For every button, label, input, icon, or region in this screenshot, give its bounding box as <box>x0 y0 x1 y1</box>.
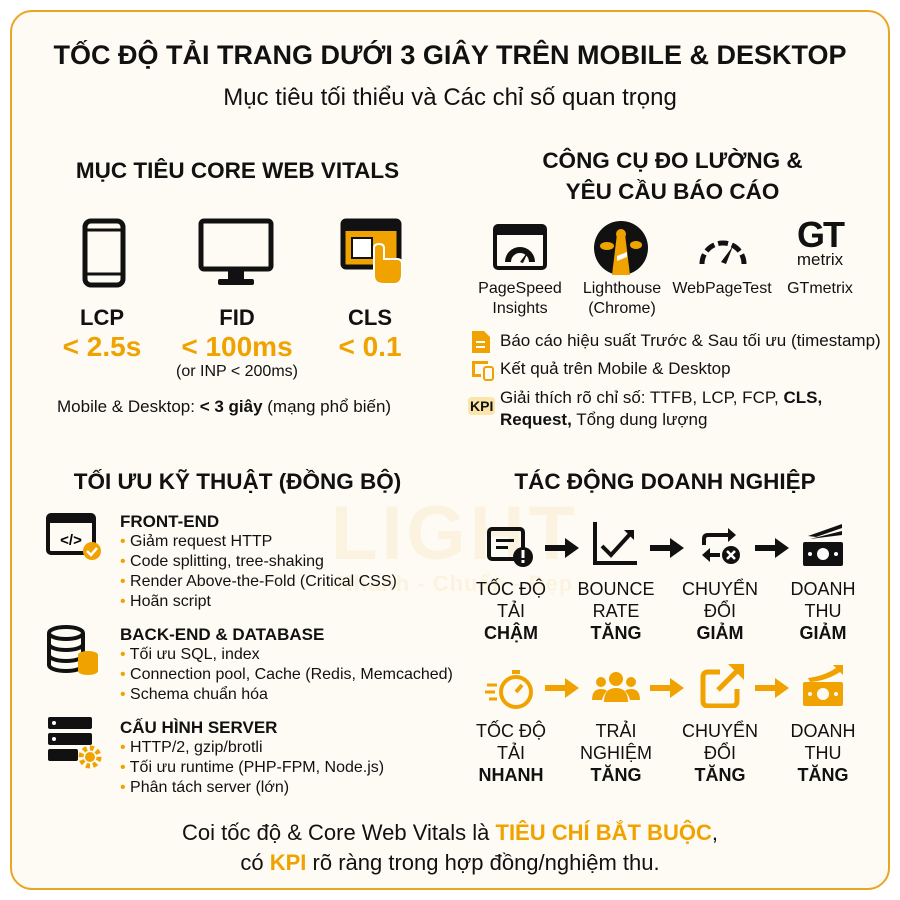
text: front-end: FRONT-END <box>120 512 219 531</box>
icon: conversion up <box>700 662 746 708</box>
row: fast chain: TĂNG <box>798 765 848 785</box>
icon: monitor <box>198 218 274 285</box>
icon: stopwatch <box>485 670 533 709</box>
labels: TẢI <box>497 601 525 621</box>
row: slow chain: CHUYỂN <box>682 579 758 599</box>
metric: CLS <box>338 305 402 362</box>
arrow <box>650 538 684 558</box>
row: fast chain: TRẢI <box>595 721 636 741</box>
tool labels: (Chrome) <box>588 300 656 317</box>
arrow <box>755 538 789 558</box>
text: back-end: Tối ưu SQL, index <box>130 646 260 663</box>
text: server <box>120 718 384 796</box>
text: back-end <box>120 625 453 703</box>
tool labels: Insights <box>492 300 548 317</box>
text: front-end: Giảm request HTTP <box>130 533 272 550</box>
arrow <box>545 678 579 698</box>
report requirements list: Giải thích rõ chỉ số: TTFB, LCP, FCP, CLS, <box>500 388 822 407</box>
row: fast chain <box>476 664 856 785</box>
heading: tools: CÔNG CỤ ĐO LƯỜNG & <box>542 148 803 173</box>
footer callout: có KPI rõ ràng trong hợp đồng/nghiệm thu. <box>240 850 660 875</box>
icon: document <box>472 331 490 353</box>
text: back-end: BACK-END & DATABASE <box>120 625 324 644</box>
icon: front-end code <box>46 513 101 560</box>
icon: cls <box>340 218 403 285</box>
row: slow chain: BOUNCE <box>577 579 654 599</box>
labels <box>476 578 546 643</box>
text: back-end: Connection pool, Cache (Redis, Memcached) <box>130 666 453 683</box>
icon: front-end code: </> <box>60 532 82 549</box>
panel: business impact <box>476 468 856 785</box>
heading: core web vitals: MỤC TIÊU CORE WEB VITALS <box>76 158 399 183</box>
metric: FID: (or INP < 200ms) <box>176 363 298 380</box>
icon: devices <box>472 361 494 381</box>
tool labels: WebPageTest <box>672 280 772 297</box>
text: front-end: Hoãn script <box>130 593 211 610</box>
icon: conversion fail <box>702 528 740 564</box>
metric: FID: < 100ms <box>181 331 293 362</box>
text: server: CẤU HÌNH SERVER <box>120 718 277 737</box>
tool labels: Lighthouse <box>583 280 661 297</box>
heading: technical: TỐI ƯU KỸ THUẬT (ĐỒNG BỘ) <box>74 469 401 494</box>
report requirements list: Báo cáo hiệu suất Trước & Sau tối ưu (timestamp) <box>500 331 881 350</box>
text: server: Phân tách server (lớn) <box>130 779 289 796</box>
labels: CHẬM <box>484 623 538 643</box>
icon: kpi: KPI <box>470 398 493 414</box>
panel: tools <box>468 148 881 429</box>
row: slow chain: TĂNG <box>590 623 642 643</box>
labels: TỐC ĐỘ <box>476 721 546 741</box>
row: fast chain: NGHIỆM <box>580 743 652 763</box>
footer callout: Coi tốc độ & Core Web Vitals là TIÊU CHÍ BẮT BUỘC, <box>182 820 718 845</box>
metric: LCP: < 2.5s <box>63 331 141 362</box>
text: server: HTTP/2, gzip/brotli <box>130 739 263 756</box>
row: slow chain: GIẢM <box>696 623 744 643</box>
row: slow chain <box>476 522 856 643</box>
icon: pagespeed <box>493 224 547 270</box>
watermark: LIGHT <box>331 491 579 576</box>
icon: money down <box>803 524 843 566</box>
icon: webpagetest <box>700 240 746 264</box>
footer callout <box>0 818 900 878</box>
icon: slow page <box>487 527 533 567</box>
heading: tools: YÊU CẦU BÁO CÁO <box>566 179 779 204</box>
text: front-end: Code splitting, tree-shaking <box>130 553 324 570</box>
title: TỐC ĐỘ TẢI TRANG DƯỚI 3 GIÂY TRÊN MOBILE & DESKTOP <box>54 40 846 70</box>
arrow <box>755 678 789 698</box>
row: fast chain: TĂNG <box>694 765 746 785</box>
row: slow chain: GIẢM <box>800 623 846 643</box>
labels <box>456 720 566 786</box>
heading: tools <box>542 148 803 204</box>
arrow <box>545 538 579 558</box>
tool labels <box>478 280 853 317</box>
row: slow chain: ĐỔI <box>704 601 736 621</box>
row: fast chain: TĂNG <box>590 765 642 785</box>
icon: users <box>592 672 640 702</box>
panel: technical optimization <box>46 468 453 796</box>
subtitle: Mục tiêu tối thiểu và Các chỉ số quan trọng <box>223 84 677 111</box>
metric: CLS: < 0.1 <box>338 331 402 362</box>
icon: server <box>48 717 102 768</box>
text: front-end: Render Above-the-Fold (Critical CSS) <box>130 573 397 590</box>
row: slow chain: RATE <box>593 601 639 621</box>
icon: database <box>47 625 98 675</box>
labels: TẢI <box>497 743 525 763</box>
icon: gtmetrix: GT <box>797 214 843 255</box>
watermark: Nhanh - Chuẩn - Đẹp <box>337 571 573 596</box>
metric: FID <box>176 305 298 380</box>
panel: core web vitals <box>57 158 403 416</box>
metric: FID: FID <box>219 305 255 330</box>
text: server: Tối ưu runtime (PHP-FPM, Node.js) <box>130 759 384 776</box>
icon: bounce chart <box>593 522 637 565</box>
icon: phone <box>82 218 126 288</box>
labels: NHANH <box>478 765 544 785</box>
icon: money up <box>800 662 846 708</box>
text: front-end <box>120 512 397 610</box>
text: back-end: Schema chuẩn hóa <box>130 686 268 703</box>
arrow <box>650 678 684 698</box>
icon: lighthouse <box>594 221 648 275</box>
row: fast chain: CHUYỂN <box>682 721 758 741</box>
row: fast chain: ĐỔI <box>704 743 736 763</box>
report requirements list <box>468 331 881 429</box>
metric: LCP: LCP <box>80 305 124 330</box>
note: mobile desktop: Mobile & Desktop: < 3 giây (mạng phổ biến) <box>57 397 391 416</box>
report requirements list: Kết quả trên Mobile & Desktop <box>500 359 731 378</box>
row: slow chain: THU <box>804 601 842 621</box>
report requirements list: Request, Tổng dung lượng <box>500 410 707 429</box>
tool labels: GTmetrix <box>787 280 853 297</box>
row: fast chain: THU <box>804 743 842 763</box>
heading: business: TÁC ĐỘNG DOANH NGHIỆP <box>514 469 816 494</box>
metric: LCP <box>63 305 141 362</box>
metric: CLS: CLS <box>348 305 392 330</box>
icon: gtmetrix: metrix <box>797 250 843 269</box>
labels: TỐC ĐỘ <box>476 579 546 599</box>
row: fast chain: DOANH <box>790 721 856 741</box>
tool labels: PageSpeed <box>478 280 562 297</box>
row: slow chain: DOANH <box>790 579 856 599</box>
